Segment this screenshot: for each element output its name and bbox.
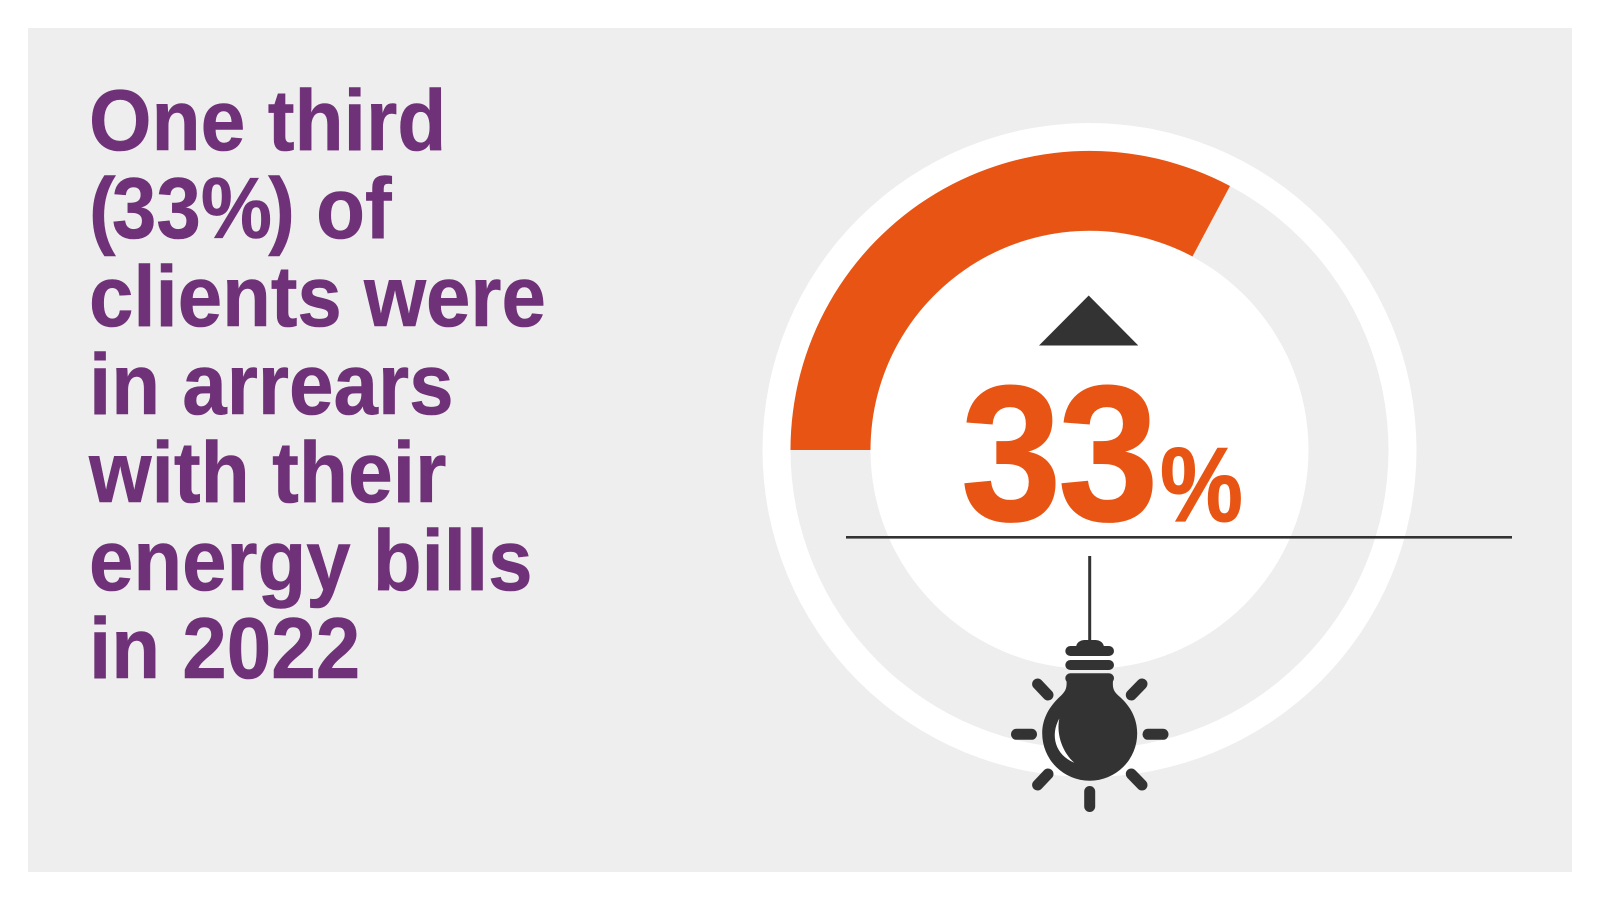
light rays [1016,684,1163,806]
icon: hanging light bulb [1016,556,1163,806]
heading: one third of clients in arrears: energy bills [89,512,533,609]
heading: one third of clients in arrears: clients were [89,248,546,345]
inner white disc [870,231,1308,669]
bulb cap [1076,640,1104,648]
big number: 33 percent: % [1160,427,1243,544]
big number: 33 percent [961,345,1243,561]
icon: up triangle [1039,296,1138,346]
heading: one third of clients in arrears: with their [88,425,446,521]
outer white ring [762,123,1416,777]
heading: one third of clients in arrears [88,73,546,697]
horizontal rule [846,536,1512,539]
heading: one third of clients in arrears: (33%) of [89,160,392,257]
heading: one third of clients in arrears: in 2022 [89,600,360,697]
orange arc segment [790,151,1230,450]
heading: one third of clients in arrears: in arrears [89,336,454,433]
bulb highlight [1055,718,1074,763]
big number: 33 percent: 33 [961,345,1155,561]
grey ring track [790,151,1388,749]
donut chart: 33 percent [762,123,1416,777]
bulb glass [1042,680,1137,781]
bulb cord [1088,556,1091,642]
heading: one third of clients in arrears: One third [89,73,446,169]
